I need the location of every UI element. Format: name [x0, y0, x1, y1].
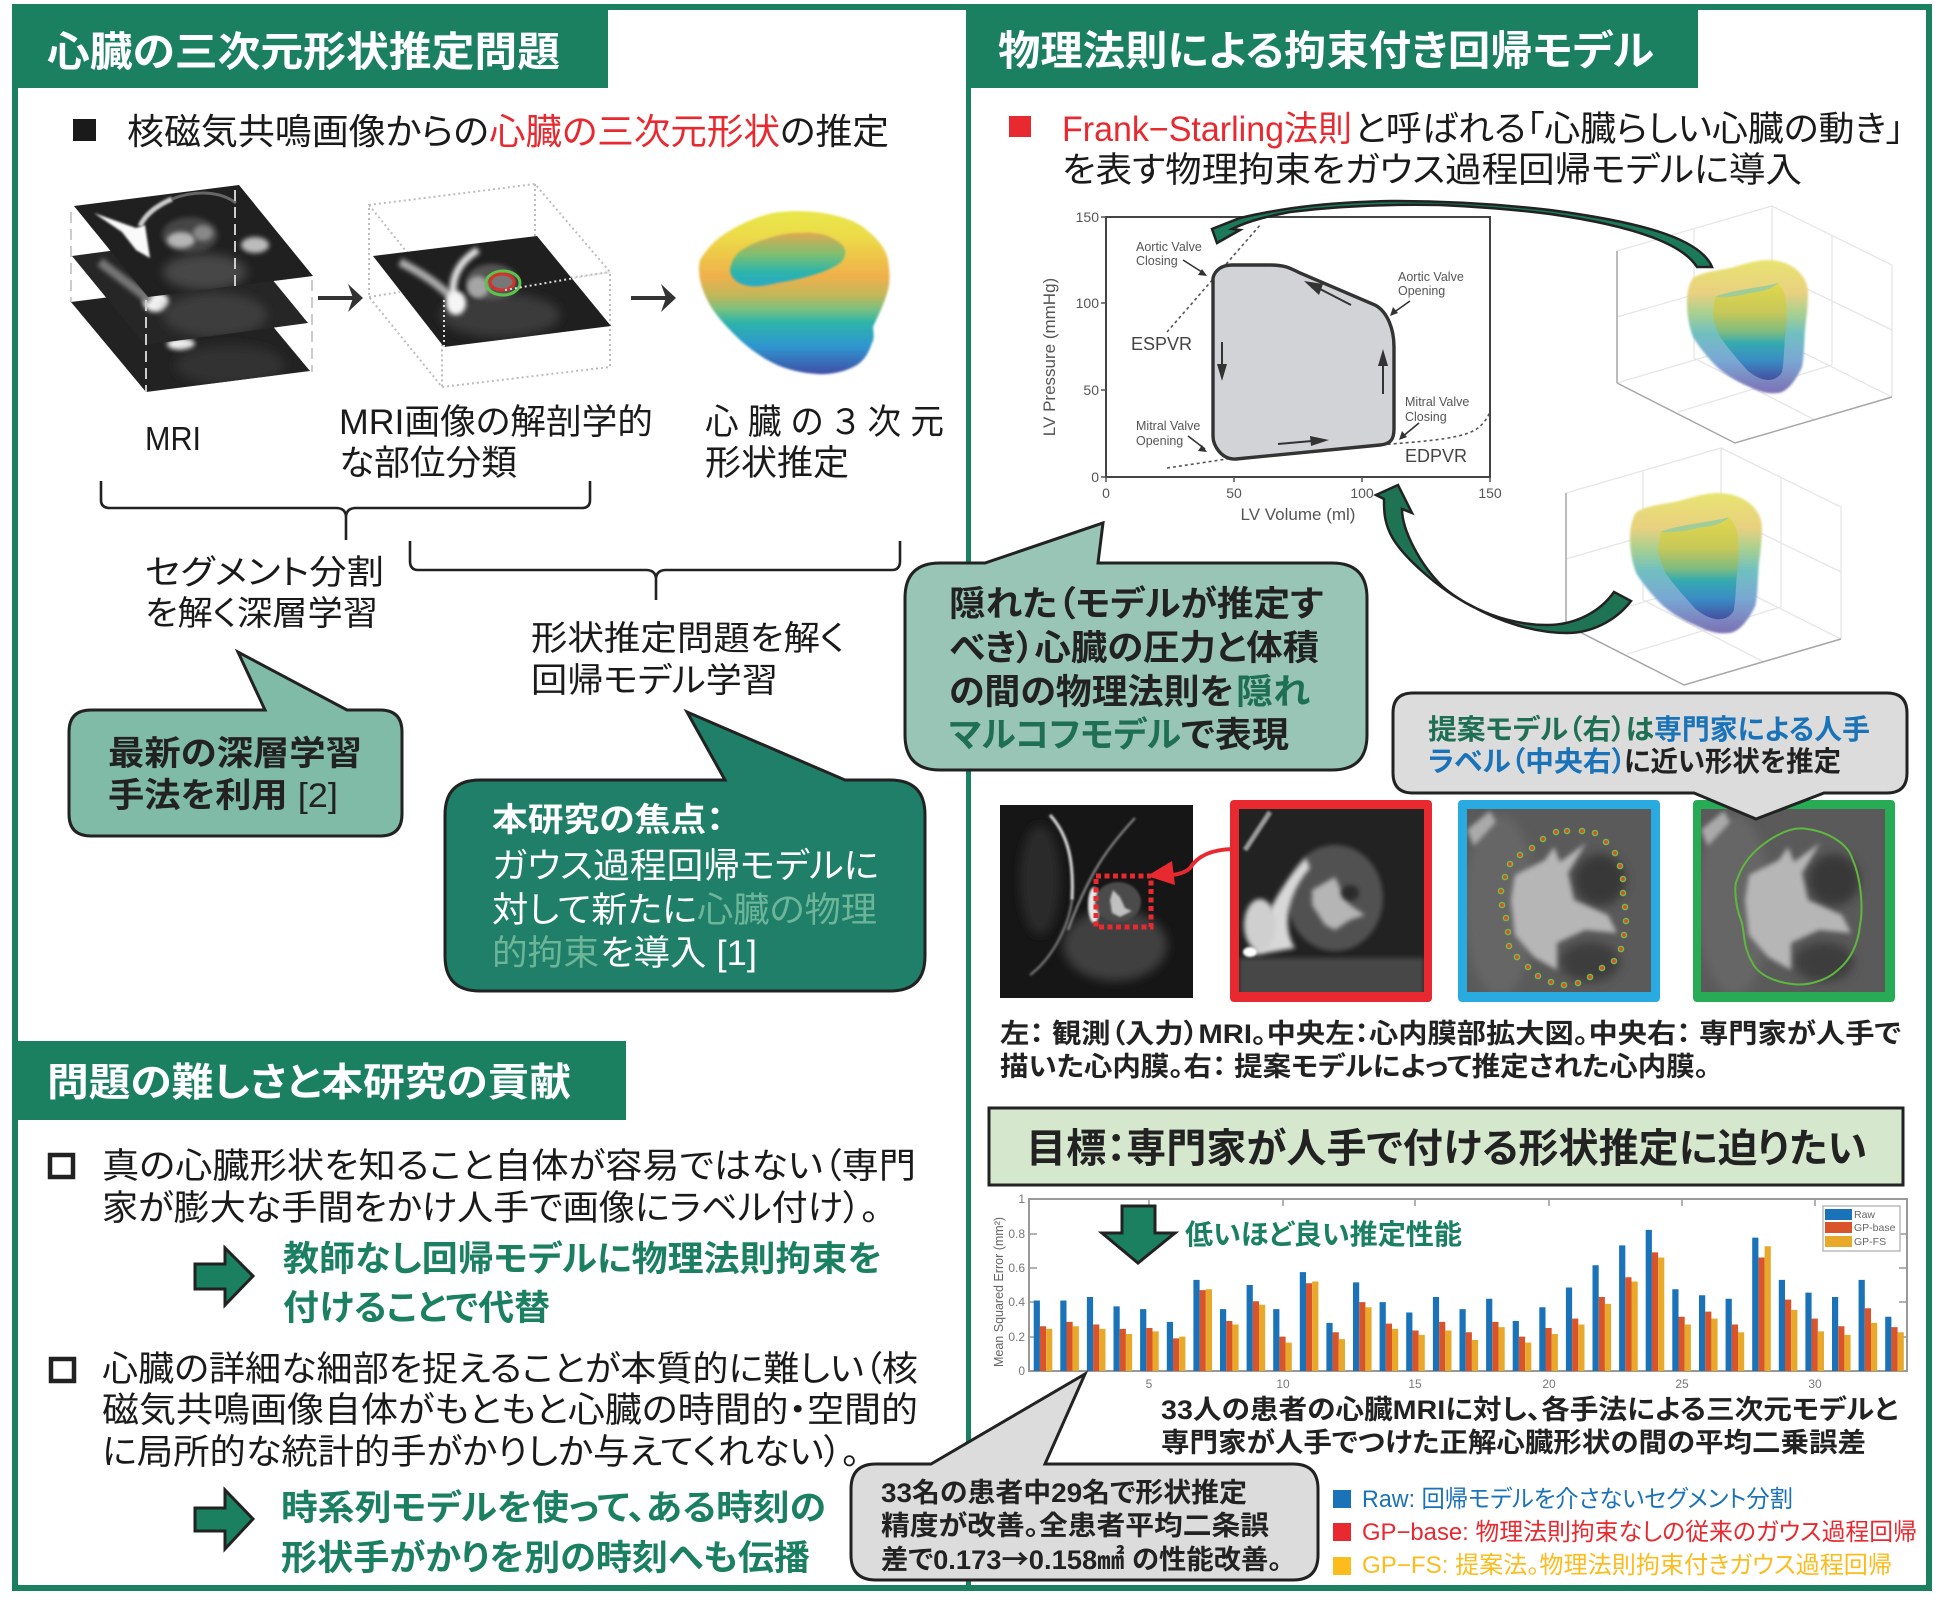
- solution text 1: [283, 1239, 882, 1328]
- solution text 1: 教師なし回帰モデルに物理法則拘束を: [283, 1239, 882, 1279]
- bar chart: mean squared error: [992, 1192, 1907, 1391]
- bracket: regression: [410, 541, 900, 600]
- legend: methods: GP−FS: 提案法。物理法則拘束付きガウス過程回帰: [1362, 1552, 1892, 1579]
- chart caption: 33人の患者の心臓MRIに対し、各手法による三次元モデルと: [1161, 1394, 1898, 1425]
- callout: proposed model vs expert labels: に近い形状を推定: [1624, 746, 1841, 777]
- goal banner: [989, 1108, 1903, 1185]
- arrow: solution 2: [195, 1490, 253, 1549]
- bullet: estimating 3D shape from MRI: 核磁気共鳴画像からの: [127, 111, 489, 152]
- callout: results summary: 精度が改善。全患者平均二条誤: [881, 1510, 1269, 1541]
- image panel: model estimate: [1693, 800, 1895, 1002]
- chart: pressure volume loop: Opening: [1136, 434, 1183, 448]
- callout: proposed model vs expert labels: ラベル（中央右）: [1428, 746, 1626, 777]
- legend: methods: GP−base: 物理法則拘束なしの従来のガウス過程回帰: [1362, 1519, 1917, 1546]
- 3D plot: upper heart: [1617, 206, 1892, 443]
- label: lower is better: 低いほど良い推定性能: [1185, 1219, 1462, 1250]
- callout: proposed model vs expert labels: [1393, 693, 1907, 819]
- header: left top: [12, 4, 608, 88]
- bullet: Frank-Starling law: [1009, 110, 1904, 190]
- bar chart: mean squared error: 15: [1408, 1377, 1422, 1391]
- chart: pressure volume loop: Closing: [1405, 410, 1447, 424]
- bullet: estimating 3D shape from MRI: 心臓の三次元形状: [489, 111, 780, 152]
- image caption: 描いた心内膜。右： 提案モデルによって推定された心内膜。: [1000, 1051, 1709, 1082]
- callout: hidden Markov model: マルコフモデル: [949, 715, 1181, 755]
- callout: focus of this research: 的拘束: [492, 934, 599, 973]
- chart: pressure volume loop: Aortic Valve: [1136, 240, 1202, 254]
- figure: segmented MRI slice in dotted box: [369, 184, 611, 387]
- bar chart: mean squared error: GP-base: [1854, 1222, 1896, 1234]
- series: GP-base: [1040, 1252, 1898, 1371]
- callout: hidden Markov model: 隠れた（モデルが推定す: [949, 584, 1323, 624]
- bar chart: mean squared error: 1: [1018, 1192, 1025, 1206]
- bar chart: mean squared error: 5: [1146, 1377, 1153, 1391]
- callout: hidden Markov model: の間の物理法則を: [949, 673, 1234, 712]
- header: left top: 心臓の三次元形状推定問題: [47, 29, 560, 75]
- callout: proposed model vs expert labels: 専門家による人手: [1654, 714, 1870, 745]
- bar chart: mean squared error: GP-FS: [1854, 1236, 1886, 1248]
- bullet: estimating 3D shape from MRI: の推定: [780, 111, 889, 152]
- callout: results summary: [851, 1374, 1318, 1580]
- callout: results summary: 33名の患者中29名で形状推定: [881, 1478, 1247, 1508]
- bullet: true shape unknown: [50, 1147, 916, 1228]
- bar chart: mean squared error: 0.8: [1008, 1227, 1025, 1241]
- bar chart: mean squared error: 30: [1808, 1377, 1822, 1391]
- label: anatomical classification: [339, 403, 653, 483]
- chart: pressure volume loop: Closing: [1136, 254, 1178, 268]
- legend: methods: Raw: 回帰モデルを介さないセグメント分割: [1362, 1486, 1793, 1513]
- callout: focus of this research: [445, 712, 925, 991]
- solution text 2: [281, 1488, 826, 1578]
- callout: focus of this research: ガウス過程回帰モデルに: [492, 847, 879, 886]
- series: GP-FS: [1046, 1246, 1904, 1371]
- bar chart: mean squared error: Mean Squared Error (mm²): [992, 1217, 1006, 1367]
- bar chart: mean squared error: 0.6: [1008, 1261, 1025, 1275]
- callout: latest deep learning: 最新の深層学習: [108, 735, 362, 773]
- chart: pressure volume loop: 150: [1076, 209, 1099, 225]
- solution text 2: 時系列モデルを使って、ある時刻の: [281, 1488, 826, 1528]
- label: anatomical classification: な部位分類: [339, 444, 517, 483]
- curved arrow: 3D heart to ESPVR: [1212, 201, 1712, 267]
- bullet: detail capture is hard: 心臓の詳細な細部を捉えることが本質的に難しい（核: [102, 1350, 918, 1389]
- bullet: true shape unknown: 真の心臓形状を知ること自体が容易ではない（専門: [102, 1147, 916, 1186]
- figure: 3D heart shape: [699, 211, 890, 374]
- bracket: segmentation: [101, 481, 590, 540]
- bullet: estimating 3D shape from MRI: [73, 111, 889, 152]
- bar chart: mean squared error: Raw: [1854, 1209, 1875, 1221]
- chart: pressure volume loop: Aortic Valve: [1398, 270, 1464, 284]
- callout: hidden Markov model: で表現: [1181, 716, 1289, 755]
- label: deep learning for segmentation: [145, 554, 384, 633]
- chart caption: 専門家が人手でつけた正解心臓形状の間の平均二乗誤差: [1161, 1427, 1866, 1458]
- bullet: Frank-Starling law: と呼ばれる「心臓らしい心臓の動き」: [1354, 110, 1904, 149]
- chart: pressure volume loop: 150: [1478, 485, 1502, 501]
- header: right top: 物理法則による拘束付き回帰モデル: [998, 28, 1654, 74]
- curved arrow: EDPVR from 3D heart: [1376, 485, 1631, 633]
- header: right top: [968, 4, 1698, 88]
- figure: stacked MRI slices: [71, 185, 313, 392]
- label: 3D shape estimation: [705, 403, 944, 483]
- header: difficulty and contribution: [12, 1041, 626, 1120]
- image panel: enlarged endocardium: [1230, 800, 1432, 1002]
- callout: results summary: 差で0.173→0.158㎟ の性能改善。: [881, 1538, 1282, 1577]
- image panel: expert annotation: [1458, 800, 1660, 1002]
- bar chart: mean squared error: 20: [1542, 1377, 1556, 1391]
- bullet: Frank-Starling law: Frank−Starling法則: [1062, 110, 1352, 149]
- bar chart: mean squared error: 10: [1276, 1377, 1290, 1391]
- arrow: MRI to segmentation: [318, 284, 363, 312]
- bullet: detail capture is hard: に局所的な統計的手がかりしか与えてくれない）。: [102, 1433, 860, 1472]
- label: regression model learning: 形状推定問題を解く: [531, 620, 845, 658]
- red arrow to region of interest: [1147, 849, 1232, 885]
- label: 3D shape estimation: 心 臓 の ３ 次 元: [705, 403, 944, 442]
- bar chart: mean squared error: 0.4: [1008, 1295, 1025, 1309]
- chart: pressure volume loop: [1040, 209, 1502, 524]
- bar chart: mean squared error: 0.2: [1008, 1330, 1025, 1344]
- callout: latest deep learning: [69, 652, 402, 836]
- solution text 2: 形状手がかりを別の時刻へも伝播: [281, 1539, 810, 1578]
- label: regression model learning: 回帰モデル学習: [531, 662, 778, 700]
- chart: pressure volume loop: EDPVR: [1405, 446, 1467, 466]
- label: deep learning for segmentation: セグメント分割: [145, 554, 384, 592]
- legend: methods: [1333, 1486, 1917, 1579]
- 3D plot: lower heart: [1566, 448, 1841, 685]
- image: full MRI with region of interest: [1000, 805, 1193, 998]
- bullet: detail capture is hard: 磁気共鳴画像自体がもともと心臓の時間的・空間的: [102, 1391, 918, 1430]
- bullet: Frank-Starling law: を表す物理拘束をガウス過程回帰モデルに導入: [1062, 151, 1802, 190]
- bullet: true shape unknown: 家が膨大な手間をかけ人手で画像にラベル付け）。: [102, 1189, 879, 1228]
- callout: hidden Markov model: べき）心臓の圧力と体積: [949, 629, 1319, 668]
- label: anatomical classification: MRI画像の解剖学的: [339, 403, 653, 442]
- callout: focus of this research: 心臓の物理: [697, 891, 877, 930]
- bullet: detail capture is hard: [51, 1350, 918, 1472]
- goal banner: 目標：専門家が人手で付ける形状推定に迫りたい: [1026, 1127, 1867, 1171]
- chart: pressure volume loop: LV Pressure (mmHg): [1040, 278, 1059, 436]
- header: difficulty and contribution: 問題の難しさと本研究の貢献: [47, 1062, 571, 1105]
- bar chart: mean squared error: 0: [1018, 1364, 1025, 1378]
- callout: hidden Markov model: 隠れ: [1236, 673, 1310, 712]
- label: deep learning for segmentation: を解く深層学習: [145, 595, 378, 633]
- label: MRI: MRI: [145, 420, 201, 457]
- series: raw: [1034, 1230, 1891, 1371]
- label: 3D shape estimation: 形状推定: [705, 444, 849, 483]
- callout: focus of this research: 対して新たに: [492, 891, 697, 930]
- chart: pressure volume loop: 100: [1076, 295, 1099, 311]
- chart: pressure volume loop: Mitral Valve: [1405, 395, 1469, 409]
- callout: hidden Markov model: [905, 523, 1367, 770]
- arrow: segmentation to 3D shape: [631, 284, 676, 312]
- chart: pressure volume loop: 100: [1350, 485, 1374, 501]
- solution text 1: 付けることで代替: [283, 1289, 550, 1328]
- chart: pressure volume loop: 0: [1102, 485, 1110, 501]
- chart caption: [1161, 1394, 1898, 1458]
- callout: focus of this research: 本研究の焦点：: [492, 801, 724, 838]
- chart: pressure volume loop: 50: [1083, 382, 1099, 398]
- callout: proposed model vs expert labels: 提案モデル（右）は: [1428, 713, 1654, 745]
- image caption: 左： 観測（入力）MRI。中央左：心内膜部拡大図。中央右： 専門家が人手で: [1000, 1018, 1901, 1049]
- image caption: [1000, 1018, 1901, 1082]
- chart: pressure volume loop: ESPVR: [1131, 334, 1192, 354]
- down arrow: lower is better: [1102, 1206, 1175, 1263]
- label: regression model learning: [531, 620, 845, 700]
- chart: pressure volume loop: 0: [1091, 469, 1099, 485]
- bar chart: mean squared error: 25: [1675, 1377, 1689, 1391]
- chart: pressure volume loop: 50: [1226, 485, 1242, 501]
- callout: focus of this research: を導入 [1]: [600, 934, 757, 973]
- chart: pressure volume loop: Opening: [1398, 284, 1445, 298]
- chart: pressure volume loop: Mitral Valve: [1136, 419, 1200, 433]
- arrow: solution 1: [195, 1248, 253, 1305]
- chart: pressure volume loop: LV Volume (ml): [1241, 505, 1355, 524]
- callout: latest deep learning: 手法を利用 [2]: [108, 777, 338, 815]
